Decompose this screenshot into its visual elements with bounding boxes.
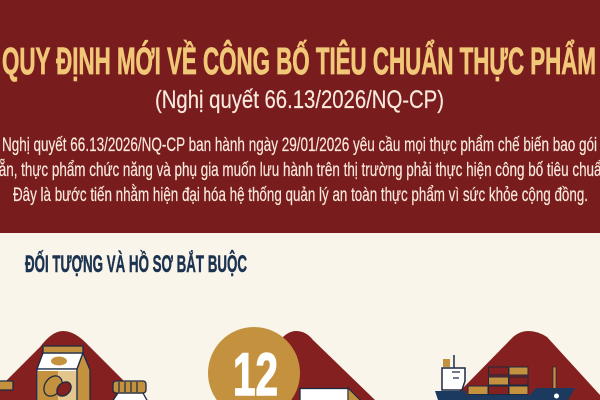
section heading: ĐỐI TƯỢNG VÀ HỒ SƠ BẮT BUỘC [25,250,247,278]
subtitle: (Nghị quyết 66.13/2026/NQ-CP) [155,86,444,114]
intro text [0,135,600,206]
icon: cargo ship [435,331,600,400]
number badge: 12 [208,327,300,400]
icon: twelve month document [208,327,375,400]
panel: red header band [0,0,600,233]
icon: packaged food [0,331,148,400]
